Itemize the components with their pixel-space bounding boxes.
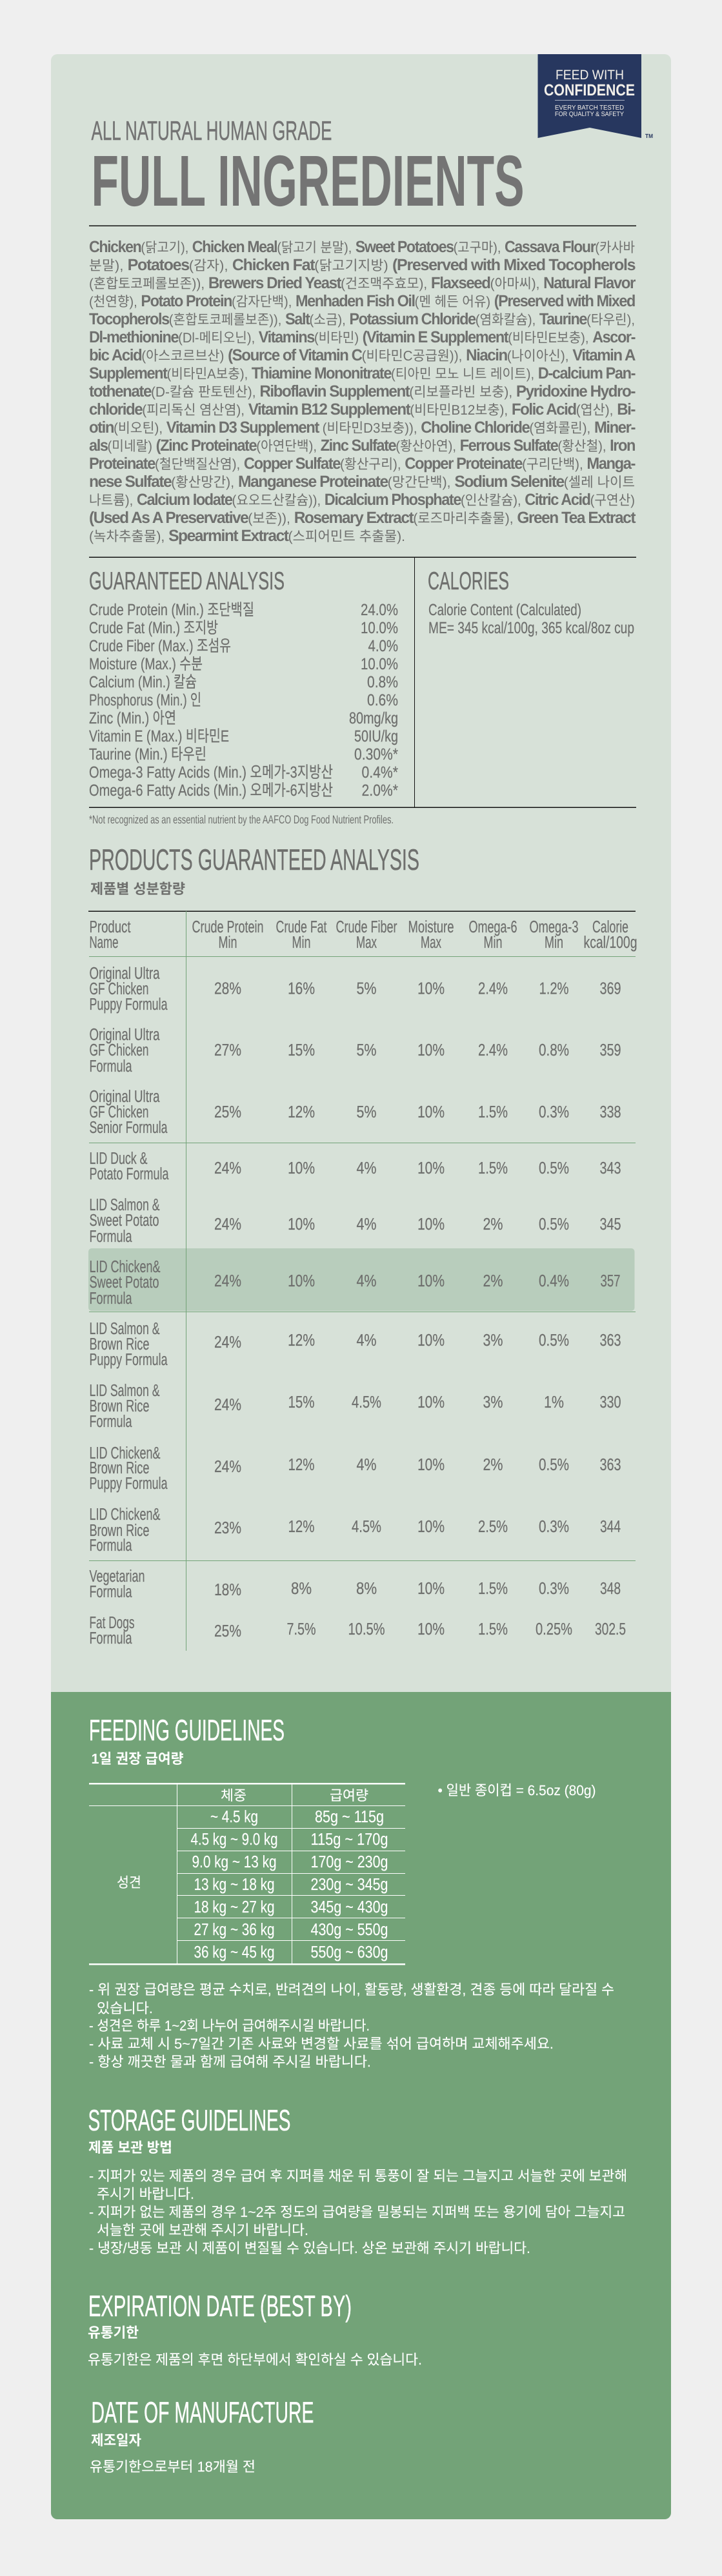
table values: 10% xyxy=(417,1619,445,1638)
product names: Puppy Formula xyxy=(89,994,168,1014)
text block: ingredient list: chloride(피리독신 염산염), Vitamin B12 Supplement(비타민B12보충), Folic Acid(엽산), Bi- xyxy=(89,400,636,418)
product names: Formula xyxy=(89,1535,132,1555)
table: feeding amounts: 18 kg ~ 27 kg xyxy=(194,1897,275,1916)
product names: Senior Formula xyxy=(89,1117,168,1137)
table: feeding amounts: ~ 4.5 kg xyxy=(210,1807,258,1826)
subheading: daily recommended amount: 1일 권장 급여량 xyxy=(92,1751,183,1767)
table: products guaranteed analysis xyxy=(88,910,637,1651)
table values: 348 xyxy=(600,1578,621,1598)
table values: 7.5% xyxy=(286,1619,316,1638)
text block: manufacture note: 유통기한으로부터 18개월 전 xyxy=(90,2459,256,2475)
product names: Sweet Potato xyxy=(89,1210,159,1230)
table values: 10% xyxy=(417,1158,445,1177)
table values: 3% xyxy=(483,1392,503,1411)
table values: 2% xyxy=(483,1455,503,1474)
table: feeding amounts: 4.5 kg ~ 9.0 kg xyxy=(191,1829,277,1849)
table values: 4% xyxy=(356,1330,377,1350)
table values: 16% xyxy=(288,979,315,998)
footnote: *Not recognized as an essential nutrient by the AAFCO Dog Food Nutrient Profiles. xyxy=(89,813,394,826)
table values: 24% xyxy=(214,1158,241,1177)
table: guaranteed analysis values: 2.0%* xyxy=(361,782,398,800)
heading: expiration date: EXPIRATION DATE (BEST BY) xyxy=(88,2289,352,2323)
table: guaranteed analysis values: 0.4%* xyxy=(361,763,398,782)
table: feeding amounts: 550g ~ 630g xyxy=(311,1942,388,1961)
table header: Min xyxy=(218,932,237,952)
table: guaranteed analysis values: 24.0% xyxy=(361,601,398,619)
text block: feeding notes xyxy=(89,1981,614,2070)
text block: calorie content: Calorie Content (Calculated) xyxy=(428,601,581,619)
table values: 12% xyxy=(288,1330,315,1350)
subheading: best by: 유통기한 xyxy=(88,2325,139,2341)
table values: 1.5% xyxy=(478,1619,508,1638)
table header: Min xyxy=(484,932,502,952)
product names: Potato Formula xyxy=(89,1164,169,1183)
table values: 10% xyxy=(417,1330,445,1350)
product names: LID Salmon & xyxy=(89,1195,160,1214)
table values: 2.4% xyxy=(478,979,508,998)
product names: LID Salmon & xyxy=(89,1381,160,1400)
table: feeding amounts: 430g ~ 550g xyxy=(311,1920,388,1939)
product names: LID Chicken& xyxy=(89,1504,160,1524)
text block: ingredient list: (천연향), Potato Protein(감자단백), Menhaden Fish Oil(멘 헤든 어유) (Preserved with Mixed xyxy=(89,292,635,310)
table values: 0.4% xyxy=(539,1271,569,1290)
heading: date of manufacture: DATE OF MANUFACTURE xyxy=(92,2395,314,2429)
note: paper cup measure: • 일반 종이컵 = 6.5oz (80g) xyxy=(437,1782,596,1798)
table: feeding amounts: 115g ~ 170g xyxy=(311,1829,388,1849)
table values: 8% xyxy=(291,1578,312,1598)
table values: 27% xyxy=(214,1040,241,1059)
table: guaranteed analysis values: Omega-3 Fatty Acids (Min.) 오메가-3지방산 xyxy=(89,763,333,782)
product names: Vegetarian xyxy=(89,1566,145,1586)
text block: ingredient list: bic Acid(아스코르브산) (Source of Vitamin C(비타민C공급원)), Niacin(나이아신), Vitamin A xyxy=(89,346,636,364)
icon: feed with confidence badge xyxy=(538,54,653,139)
table values: 1% xyxy=(544,1392,564,1411)
heading: feeding guidelines: FEEDING GUIDELINES xyxy=(89,1713,285,1747)
table values: 0.8% xyxy=(539,1040,569,1059)
table header: Moisture xyxy=(408,917,454,936)
table: feeding amounts: 13 kg ~ 18 kg xyxy=(194,1874,275,1894)
product names: Puppy Formula xyxy=(89,1350,168,1369)
text block: ingredient list: als(미네랄) (Zinc Proteinate(아연단백), Zinc Sulfate(황산아연), Ferrous Sulfate(황산철), Iron xyxy=(89,437,635,455)
table: guaranteed analysis values: Taurine (Min.) 타우린 xyxy=(89,745,206,763)
product names: LID Duck & xyxy=(89,1148,147,1168)
table values: 18% xyxy=(214,1580,241,1599)
table: guaranteed analysis values: 50IU/kg xyxy=(354,727,398,745)
table values: 5% xyxy=(356,1102,377,1121)
heading: storage guidelines: STORAGE GUIDELINES xyxy=(88,2103,290,2137)
text block: ingredient list: Tocopherols(혼합토코페롤보존)), Salt(소금), Potassium Chloride(염화칼슘), Taurine(타우린), xyxy=(89,310,635,328)
product names: GF Chicken xyxy=(89,1102,148,1121)
product names: Formula xyxy=(89,1288,132,1308)
text block: storage notes: 서늘한 곳에 보관해 주시기 바랍니다. xyxy=(97,2222,308,2238)
table: guaranteed analysis values: 0.6% xyxy=(367,691,398,709)
table values: 5% xyxy=(356,1040,377,1059)
product names: LID Chicken& xyxy=(89,1443,160,1462)
table values xyxy=(214,979,626,1640)
table: feeding amounts: 36 kg ~ 45 kg xyxy=(194,1942,275,1961)
table header: Crude Fiber xyxy=(336,917,397,936)
table values: 8% xyxy=(356,1578,377,1598)
table values: 4% xyxy=(356,1158,377,1177)
text block: storage notes xyxy=(89,2168,627,2256)
icon: feed with confidence badge: CONFIDENCE xyxy=(544,81,635,99)
table header xyxy=(89,917,637,952)
product names: Original Ultra xyxy=(89,1025,160,1044)
table values: 363 xyxy=(600,1455,621,1474)
table values: 0.5% xyxy=(539,1158,569,1177)
table values: 0.3% xyxy=(539,1517,569,1536)
table: feeding amounts: 성견 xyxy=(117,1874,141,1891)
table values: 359 xyxy=(600,1040,621,1059)
subheading: Korean product analysis: 제품별 성분함량 xyxy=(90,881,185,897)
table values: 345 xyxy=(600,1214,621,1234)
product names: LID Salmon & xyxy=(89,1319,160,1338)
table values: 10% xyxy=(288,1271,315,1290)
table values: 4.5% xyxy=(352,1392,381,1411)
product names: Formula xyxy=(89,1226,132,1246)
table: guaranteed analysis values: Zinc (Min.) 아연 xyxy=(89,709,176,727)
text block: calorie content xyxy=(428,601,634,637)
table header: Crude Fat xyxy=(276,917,327,936)
table values: 330 xyxy=(600,1392,621,1411)
table values: 5% xyxy=(356,979,377,998)
table: feeding amounts: 9.0 kg ~ 13 kg xyxy=(192,1852,276,1871)
heading: guaranteed analysis: GUARANTEED ANALYSIS xyxy=(89,567,285,595)
table values: 1.5% xyxy=(478,1578,508,1598)
table: guaranteed analysis values xyxy=(89,601,398,800)
table values: 0.3% xyxy=(539,1578,569,1598)
table values: 3% xyxy=(483,1330,503,1350)
table values: 0.3% xyxy=(539,1102,569,1121)
product names: Sweet Potato xyxy=(89,1272,159,1292)
table: guaranteed analysis values: Moisture (Max.) 수분 xyxy=(89,655,203,673)
text block: feeding notes: - 사료 교체 시 5~7일간 기존 사료와 변경할 사료를 섞어 급여하며 교체해주세요. xyxy=(89,2036,554,2052)
table: guaranteed analysis values: Vitamin E (Max.) 비타민E xyxy=(89,727,229,745)
table values: 10% xyxy=(288,1158,315,1177)
text block: ingredient list: 나트륨), Calcium Iodate(요오드산칼슘)), Dicalcium Phosphate(인산칼슘), Citric Acid(구연산) xyxy=(89,491,635,509)
table header: Max xyxy=(421,932,441,952)
table: feeding amounts: 170g ~ 230g xyxy=(311,1852,388,1871)
product names: Puppy Formula xyxy=(89,1473,168,1493)
product names: Formula xyxy=(89,1628,132,1647)
table header: Max xyxy=(356,932,377,952)
table: guaranteed analysis values: Crude Fiber (Max.) 조섬유 xyxy=(89,637,231,655)
table values: 0.5% xyxy=(539,1455,569,1474)
table values: 10% xyxy=(417,1455,445,1474)
table values: 369 xyxy=(600,979,621,998)
table: guaranteed analysis values: 4.0% xyxy=(368,637,398,655)
panel: ingredients and analysis xyxy=(51,54,671,1692)
table: guaranteed analysis values: Crude Protein (Min.) 조단백질 xyxy=(89,601,254,619)
product names: Formula xyxy=(89,1411,132,1431)
text block: storage notes: - 지퍼가 없는 제품의 경우 1~2주 정도의 급여량을 밀봉되는 지퍼백 또는 용기에 담아 그늘지고 xyxy=(89,2204,625,2220)
text block: feeding notes: - 성견은 하루 1~2회 나누어 급여해주시길 바랍니다. xyxy=(89,2018,370,2034)
table values: 24% xyxy=(214,1214,241,1234)
text block: ingredient list: (혼합토코페롤보존)), Brewers Dried Yeast(건조맥주효모), Flaxseed(아마씨), Natural Flavor xyxy=(89,274,636,292)
product names: Fat Dogs xyxy=(89,1613,134,1632)
text block: ingredient list: otin(비오틴), Vitamin D3 Supplement (비타민D3보충)), Choline Chloride(염화콜린), Miner- xyxy=(89,418,636,437)
table: guaranteed analysis values: Calcium (Min.) 칼슘 xyxy=(89,673,197,691)
table: feeding amounts: 85g ~ 115g xyxy=(315,1807,384,1826)
table values: 10.5% xyxy=(348,1619,385,1638)
table: feeding amounts: 체중 xyxy=(221,1787,246,1804)
table values: 23% xyxy=(214,1518,241,1537)
table: feeding amounts xyxy=(89,1783,405,1965)
table header: Name xyxy=(89,932,119,952)
table values: 10% xyxy=(417,979,445,998)
icon: feed with confidence badge: FEED WITH xyxy=(556,68,624,83)
table: guaranteed analysis values: Phosphorus (Min.) 인 xyxy=(89,691,201,709)
icon: feed with confidence badge: TM xyxy=(645,133,653,139)
table values: 338 xyxy=(600,1102,621,1121)
subheading: storage method: 제품 보관 방법 xyxy=(88,2139,172,2156)
table values: 357 xyxy=(600,1271,621,1290)
text block: storage notes: - 냉장/냉동 보관 시 제품이 변질될 수 있습니다. 상온 보관해 주시기 바랍니다. xyxy=(89,2240,530,2256)
table values: 10% xyxy=(417,1392,445,1411)
table header: Omega-6 xyxy=(468,917,517,936)
table header: Crude Protein xyxy=(192,917,263,936)
table header: Min xyxy=(292,932,311,952)
table values: 12% xyxy=(288,1517,315,1536)
table values: 10% xyxy=(417,1040,445,1059)
table values: 4% xyxy=(356,1271,377,1290)
text block: ingredient list xyxy=(89,238,636,545)
table: guaranteed analysis values: 10.0% xyxy=(361,619,398,637)
text block: ingredient list: tothenate(D-칼슘 판토텐산), Riboflavin Supplement(리보플라빈 보충), Pyridoxine Hydro- xyxy=(89,382,636,400)
table values: 0.25% xyxy=(536,1619,572,1638)
table: guaranteed analysis values: 80mg/kg xyxy=(349,709,398,727)
table values: 0.5% xyxy=(539,1330,569,1350)
table values: 1.5% xyxy=(478,1102,508,1121)
table values: 10% xyxy=(417,1102,445,1121)
text block: ingredient list: Chicken(닭고기), Chicken Meal(닭고기 분말), Sweet Potatoes(고구마), Cassava Flour(카사바 xyxy=(89,238,635,256)
table header: Product xyxy=(89,917,131,936)
text block: feeding notes: - 항상 깨끗한 물과 함께 급여해 주시길 바랍니다. xyxy=(89,2054,371,2070)
table: feeding amounts: 230g ~ 345g xyxy=(311,1874,388,1894)
heading: calories: CALORIES xyxy=(428,567,509,595)
icon: feed with confidence badge: EVERY BATCH TESTED xyxy=(555,104,624,112)
table values: 10% xyxy=(288,1214,315,1234)
table values: 24% xyxy=(214,1271,241,1290)
table: guaranteed analysis values: 10.0% xyxy=(361,655,398,673)
table values: 28% xyxy=(214,979,241,998)
product names: Brown Rice xyxy=(89,1334,150,1353)
table values: 2% xyxy=(483,1214,503,1234)
text block: expiration note: 유통기한은 제품의 후면 하단부에서 확인하실 수 있습니다. xyxy=(88,2352,422,2368)
table values: 10% xyxy=(417,1271,445,1290)
product names: Formula xyxy=(89,1056,132,1076)
panel: guidelines xyxy=(51,1692,671,2519)
table: guaranteed analysis values: Omega-6 Fatty Acids (Min.) 오메가-6지방산 xyxy=(89,782,333,800)
product names xyxy=(89,963,169,1647)
text block: ingredient list: Dl-methionine(Dl-메티오닌), Vitamins(비타민) (Vitamin E Supplement(비타민E보충), Ascor- xyxy=(89,328,636,346)
table values: 25% xyxy=(214,1102,241,1121)
product names: Brown Rice xyxy=(89,1458,150,1477)
table header: Calorie xyxy=(592,917,628,936)
text block: ingredient list: Supplement(비타민A보충), Thiamine Mononitrate(티아민 모노 니트 레이트), D-calcium Pan- xyxy=(89,364,636,382)
table values: 15% xyxy=(288,1392,315,1411)
text block: ingredient list: 분말), Potatoes(감자), Chicken Fat(닭고기지방) (Preserved with Mixed Tocopherols xyxy=(89,256,636,274)
text block: feeding notes: 있습니다. xyxy=(97,2000,153,2016)
table values: 344 xyxy=(600,1517,621,1536)
table values: 10% xyxy=(417,1517,445,1536)
table values: 2% xyxy=(483,1271,503,1290)
product names: Original Ultra xyxy=(89,963,160,983)
product names: GF Chicken xyxy=(89,1040,148,1059)
table header: Omega-3 xyxy=(529,917,578,936)
table values: 24% xyxy=(214,1457,241,1476)
table: guaranteed analysis values: Crude Fat (Min.) 조지방 xyxy=(89,619,218,637)
table values: 302.5 xyxy=(595,1619,626,1638)
text block: feeding notes: - 위 권장 급여량은 평균 수치로, 반려견의 나이, 활동량, 생활환경, 견종 등에 따라 달라질 수 xyxy=(89,1981,614,1998)
product names: Brown Rice xyxy=(89,1520,150,1540)
table values: 12% xyxy=(288,1102,315,1121)
table values: 363 xyxy=(600,1330,621,1350)
table: feeding amounts: 급여량 xyxy=(330,1787,368,1804)
text block: storage notes: - 지퍼가 있는 제품의 경우 급여 후 지퍼를 채운 뒤 통풍이 잘 되는 그늘지고 서늘한 곳에 보관해 xyxy=(89,2168,627,2184)
table: feeding amounts: 27 kg ~ 36 kg xyxy=(194,1920,275,1939)
table values: 10% xyxy=(417,1578,445,1598)
text block: ingredient list: Proteinate(철단백질산염), Copper Sulfate(황산구리), Copper Proteinate(구리단백), Manga- xyxy=(89,455,636,473)
table values: 25% xyxy=(214,1621,241,1640)
table values: 24% xyxy=(214,1332,241,1352)
table: guaranteed analysis values: 0.30%* xyxy=(354,745,398,763)
table values: 1.5% xyxy=(478,1158,508,1177)
text block: ingredient list: (Used As A Preservative(보존)), Rosemary Extract(로즈마리추출물), Green Tea Extract xyxy=(89,509,636,527)
table values: 2.5% xyxy=(478,1517,508,1536)
table values: 10% xyxy=(417,1214,445,1234)
product names: GF Chicken xyxy=(89,979,148,998)
title: ALL NATURAL HUMAN GRADE xyxy=(92,115,332,146)
table: guaranteed analysis values: 0.8% xyxy=(367,673,398,691)
table values: 4% xyxy=(356,1214,377,1234)
table values: 2.4% xyxy=(478,1040,508,1059)
product names: Formula xyxy=(89,1582,132,1601)
subheading: manufacture date: 제조일자 xyxy=(91,2432,141,2448)
table values: 4% xyxy=(356,1455,377,1474)
table values: 12% xyxy=(288,1455,315,1474)
text block: ingredient list: nese Sulfate(황산망간), Manganese Proteinate(망간단백), Sodium Selenite(셀레 나이트 xyxy=(89,473,635,491)
text block: ingredient list: (녹차추출물), Spearmint Extract(스피어민트 추출물). xyxy=(89,527,405,545)
product names: LID Chicken& xyxy=(89,1257,160,1276)
table header: kcal/100g xyxy=(583,932,637,952)
table: feeding amounts: 345g ~ 430g xyxy=(311,1897,388,1916)
title xyxy=(92,115,524,221)
table header: Min xyxy=(545,932,563,952)
table values: 1.2% xyxy=(539,979,569,998)
table values: 15% xyxy=(288,1040,315,1059)
product names: Original Ultra xyxy=(89,1086,160,1106)
table values: 4.5% xyxy=(352,1517,381,1536)
table values: 24% xyxy=(214,1395,241,1414)
table values: 343 xyxy=(600,1158,621,1177)
heading: products guaranteed analysis: PRODUCTS GUARANTEED ANALYSIS xyxy=(89,843,419,876)
product names: Brown Rice xyxy=(89,1396,150,1415)
text block: calorie content: ME= 345 kcal/100g, 365 kcal/8oz cup xyxy=(428,619,634,637)
text block: storage notes: 주시기 바랍니다. xyxy=(97,2186,194,2202)
icon: feed with confidence badge: FOR QUALITY & SAFETY xyxy=(555,111,624,118)
highlighted row background xyxy=(88,1248,635,1311)
table values: 0.5% xyxy=(539,1214,569,1234)
